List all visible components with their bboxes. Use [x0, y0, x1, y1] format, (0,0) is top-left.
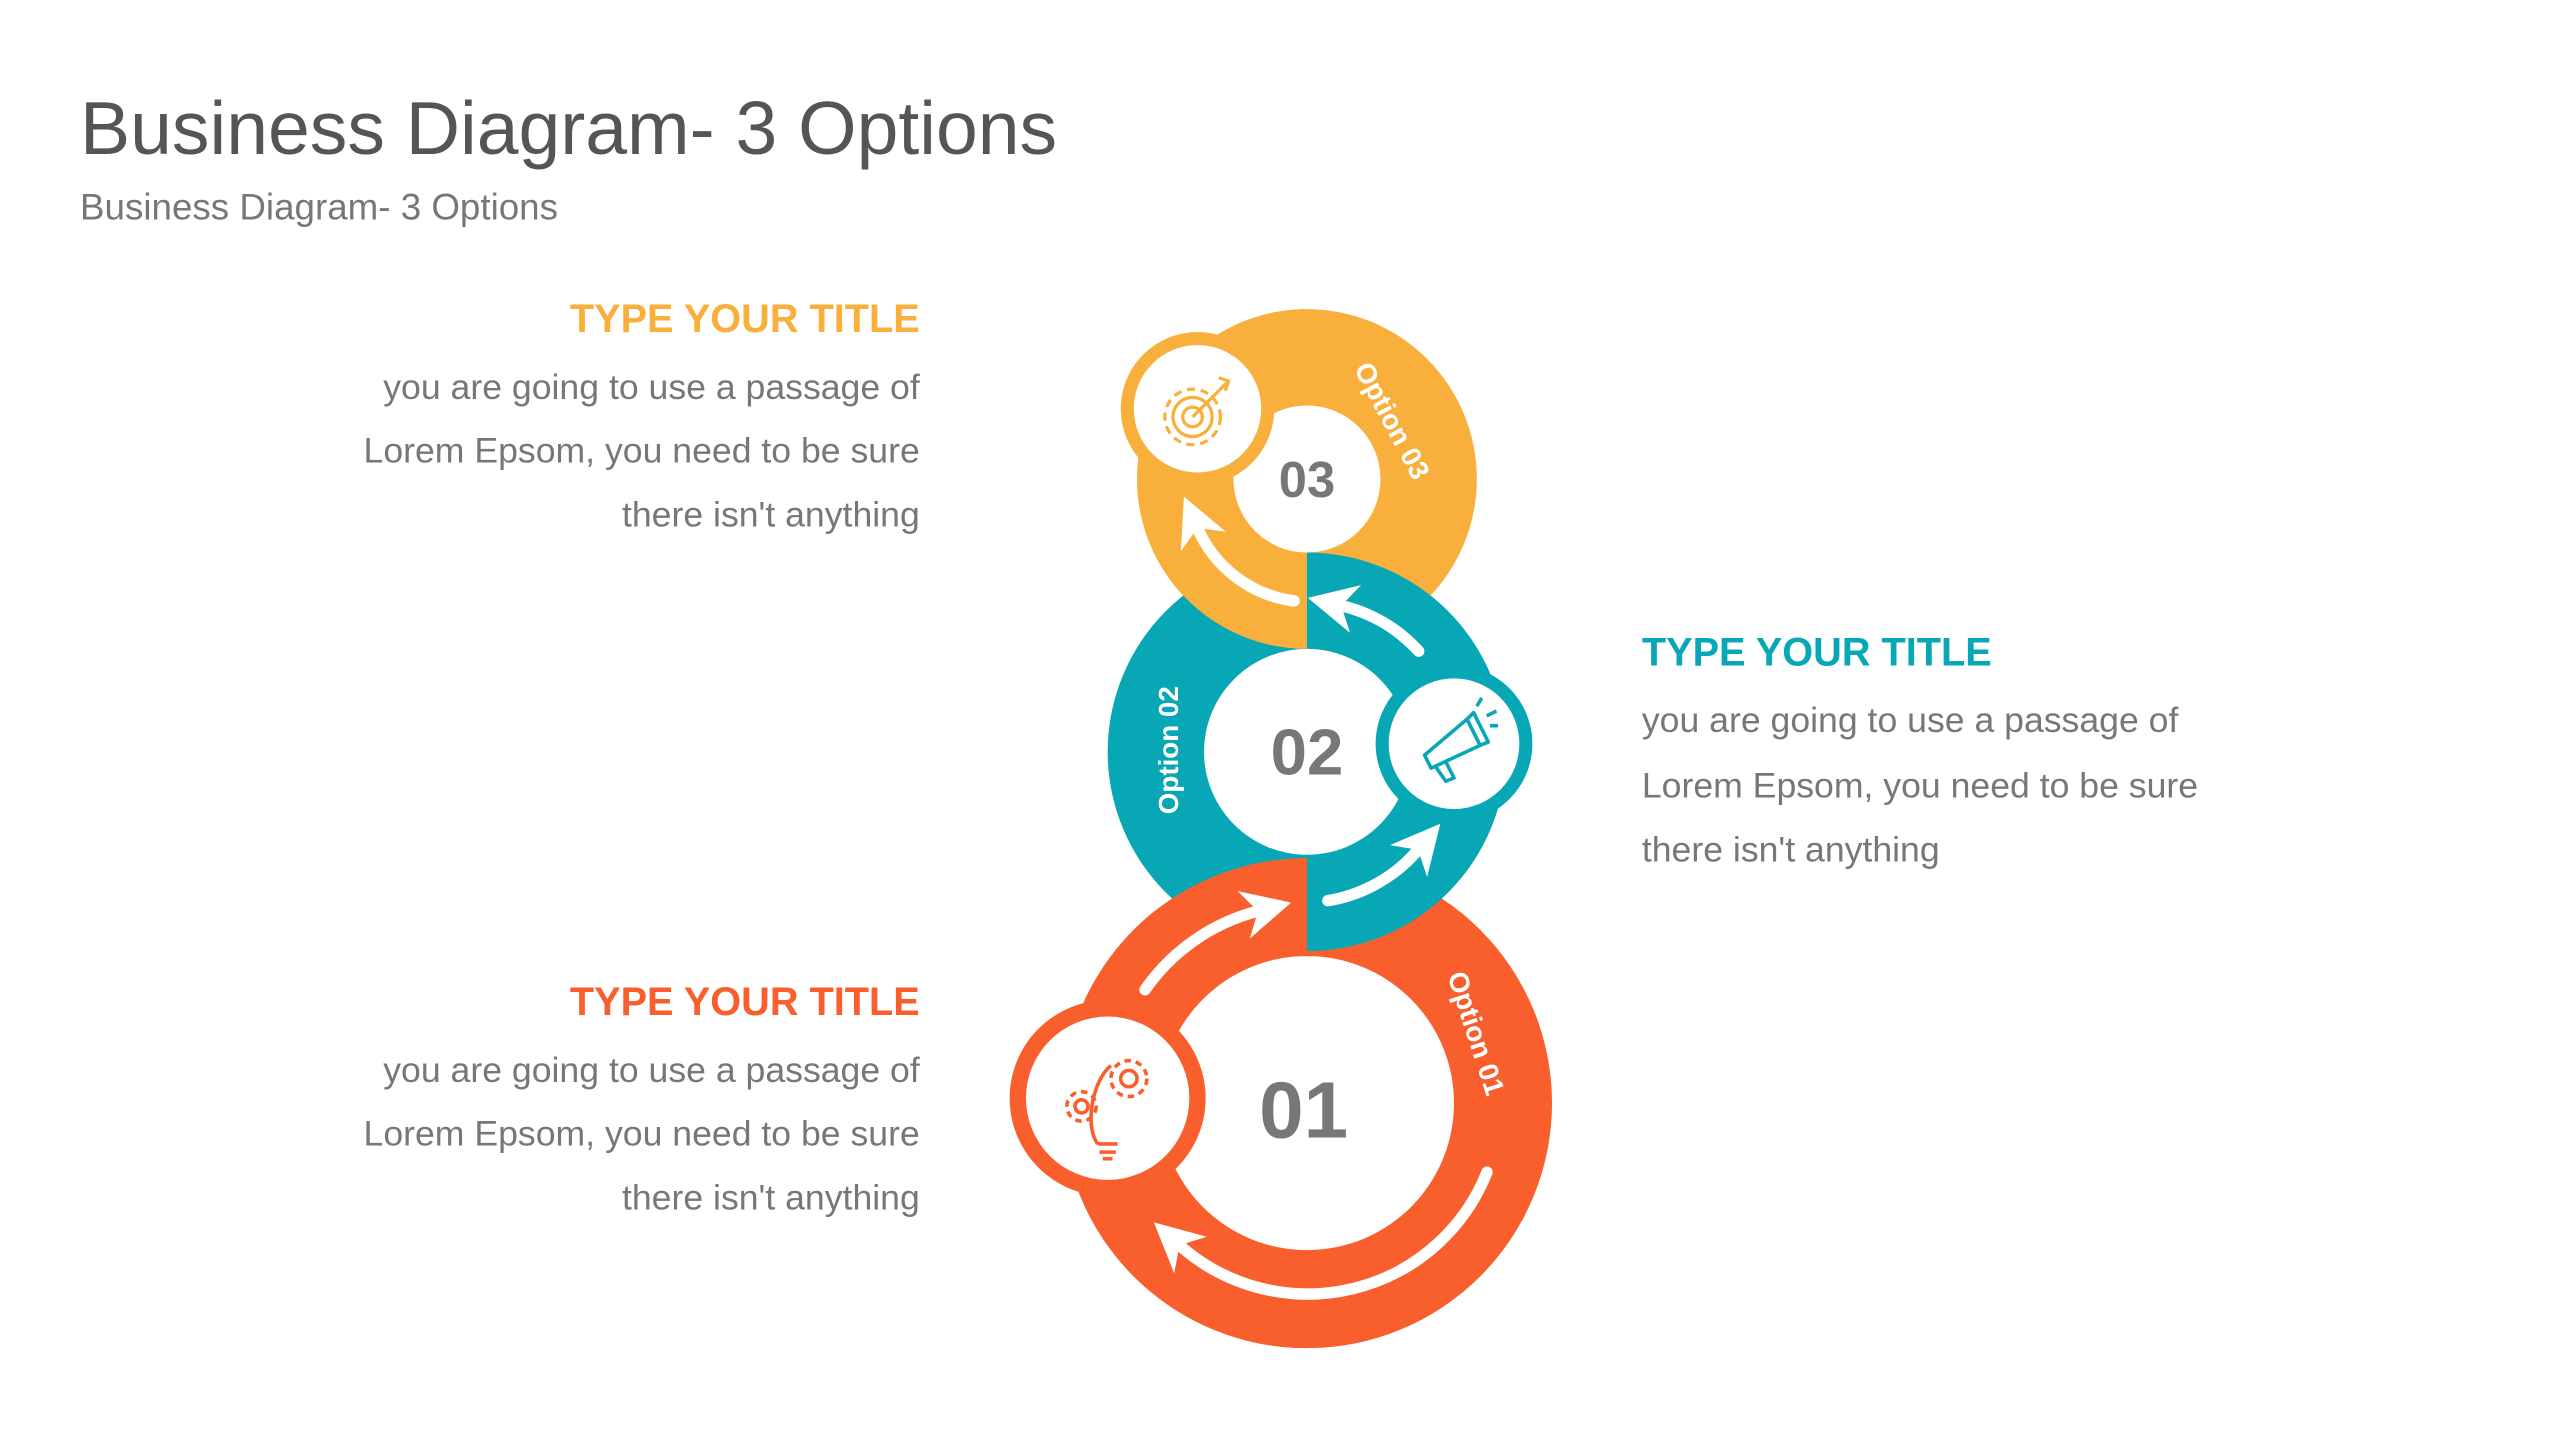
text block: option 03: there isn't anything	[622, 494, 920, 534]
text block: option 03: Lorem Epsom, you need to be sure	[364, 431, 920, 471]
text block: option 02: TYPE YOUR TITLE	[1642, 630, 1992, 674]
diagram: Option 02	[1153, 686, 1184, 814]
text block: option 01: TYPE YOUR TITLE	[570, 980, 920, 1024]
icon: bulb gears (01)	[1010, 1000, 1206, 1196]
text block: option 03	[364, 297, 920, 534]
diagram: 02	[1271, 716, 1343, 789]
text block: option 03: TYPE YOUR TITLE	[570, 297, 920, 341]
diagram	[1010, 309, 1552, 1348]
text block: option 01: you are going to use a passage of	[383, 1050, 920, 1090]
text block: option 02: Lorem Epsom, you need to be sure	[1642, 766, 2198, 806]
text block: option 01: Lorem Epsom, you need to be sure	[364, 1114, 920, 1154]
text block: option 01: there isn't anything	[622, 1177, 920, 1217]
numbers: 03	[1279, 451, 1335, 508]
icon: megaphone (02)	[1376, 665, 1532, 822]
title: Business Diagram- 3 Options	[80, 86, 1057, 170]
diagram: Option 01	[1442, 968, 1511, 1099]
text block: option 02	[1642, 630, 2198, 869]
text block: option 01	[364, 980, 920, 1217]
subtitle: Business Diagram- 3 Options	[80, 186, 558, 227]
option labels: Option 03	[1348, 357, 1436, 484]
diagram: 01	[1259, 1065, 1348, 1154]
arrows	[1145, 528, 1487, 1294]
text block: option 02: there isn't anything	[1642, 829, 1940, 869]
text block: option 02: you are going to use a passage of	[1642, 700, 2178, 740]
text block: option 03: you are going to use a passage of	[383, 367, 920, 407]
icon: target gear (03)	[1121, 332, 1274, 486]
